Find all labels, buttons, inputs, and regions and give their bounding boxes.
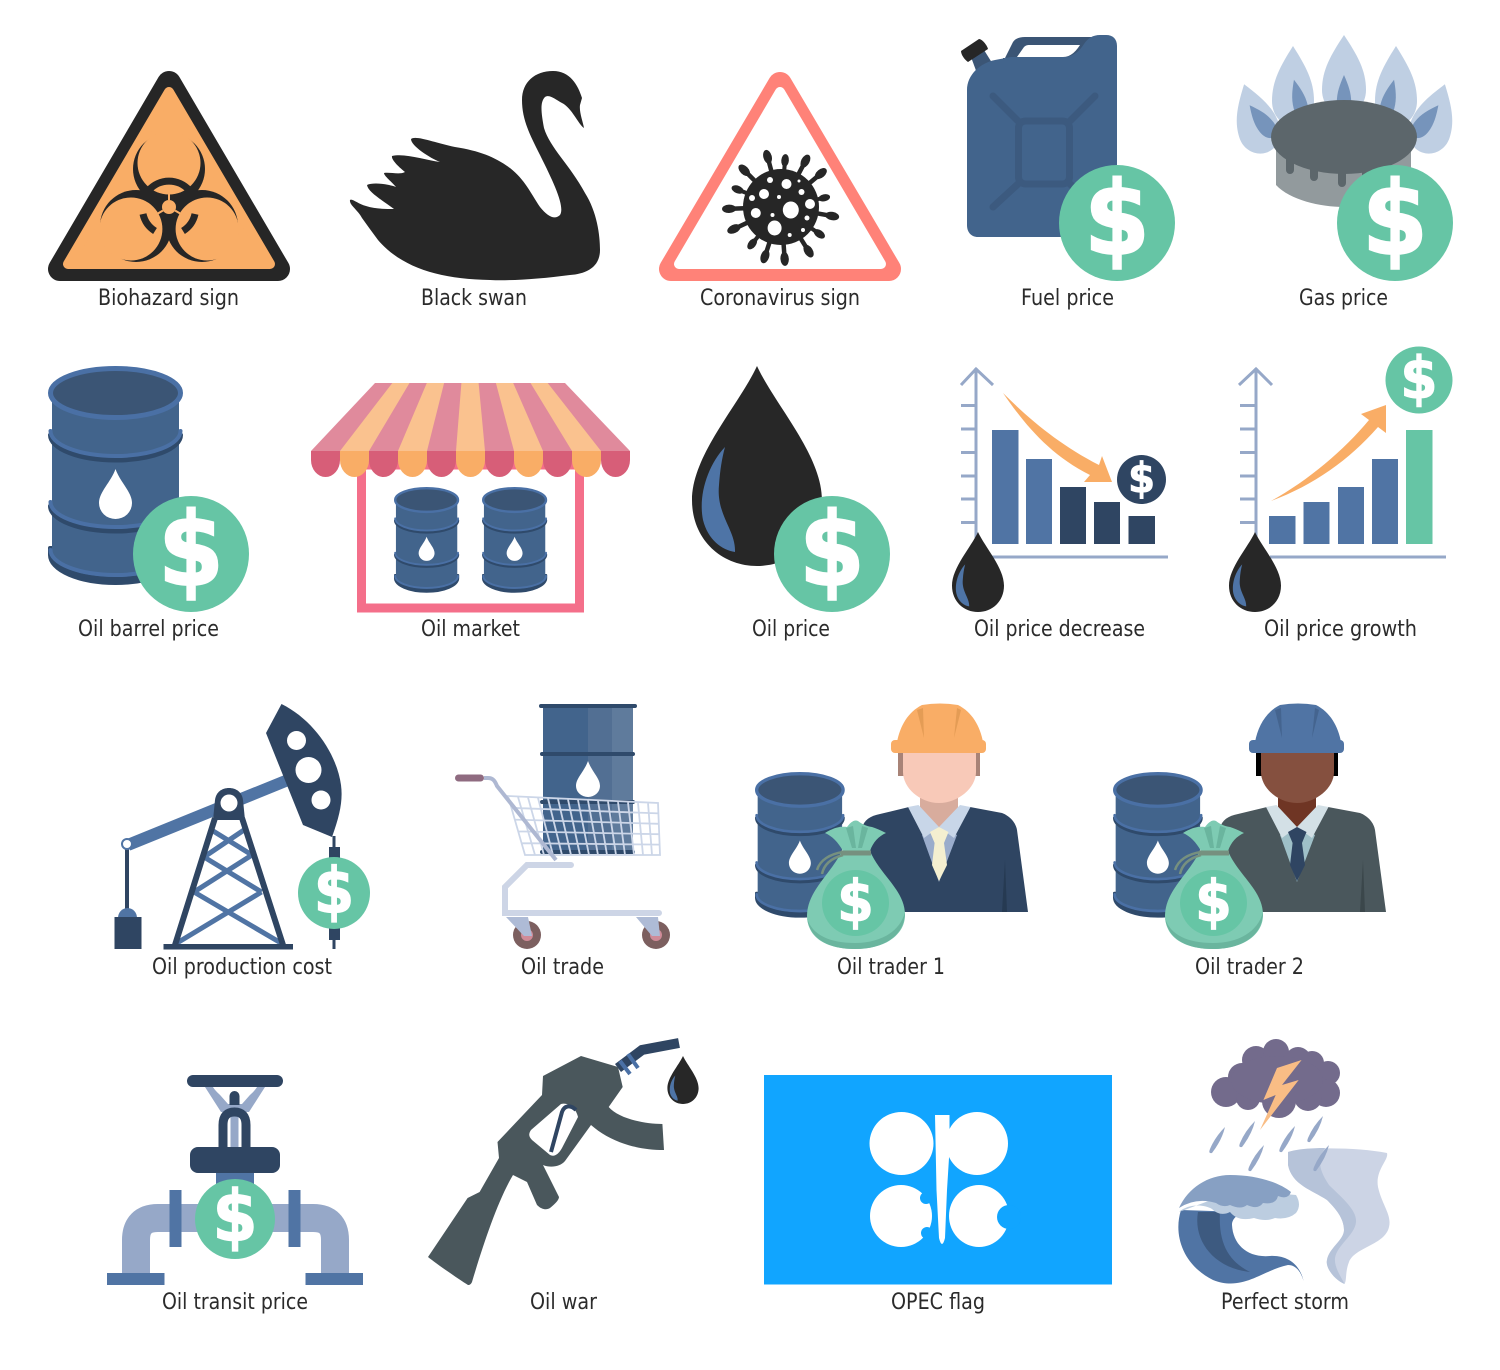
icon: flag — [764, 1075, 1112, 1284]
icon: pipe valve — [107, 1075, 363, 1285]
icon: dollar coin: $ — [213, 1176, 257, 1257]
panel: OPEC flag — [764, 1075, 1112, 1315]
panel: fuel price — [961, 35, 1175, 311]
icon: money bag — [807, 820, 905, 949]
panel: oil price growth — [1229, 345, 1452, 642]
label: Fuel price — [1021, 286, 1114, 311]
icon: fuel nozzle gun — [428, 1043, 679, 1285]
icon: money bag: $ — [1195, 868, 1232, 935]
panel: gas price — [1224, 35, 1465, 311]
icon: jerry can — [961, 35, 1117, 237]
icon: market frame — [362, 465, 580, 608]
label: Oil war — [530, 1290, 598, 1315]
icon: biohazard triangle — [60, 83, 278, 269]
icon: money bag: $ — [837, 868, 874, 935]
icon: dollar coin: $ — [799, 491, 865, 610]
panel: oil war — [428, 1043, 699, 1315]
panel: oil trader 2 — [1114, 704, 1386, 980]
panel: biohazard sign — [60, 83, 278, 311]
icon: shopping cart — [455, 774, 670, 949]
label: Biohazard sign — [98, 286, 239, 311]
arrow: growth — [1271, 405, 1386, 501]
icon: navy dollar coin: $ — [1128, 454, 1155, 503]
label: Oil market — [421, 617, 520, 642]
icon: dollar coin: $ — [314, 855, 354, 928]
panel: oil market — [311, 383, 630, 642]
icon: dollar coin: $ — [1084, 160, 1150, 279]
icon: small oil drop — [667, 1056, 699, 1104]
label: Perfect storm — [1221, 1290, 1349, 1315]
icon: virus triangle — [671, 84, 889, 269]
label: Coronavirus sign — [700, 286, 860, 311]
label: Oil price decrease — [974, 617, 1145, 642]
chart: falling bars — [961, 368, 1168, 557]
label: OPEC flag — [891, 1290, 985, 1315]
icon: small oil drop — [1229, 532, 1281, 612]
label: Oil price growth — [1264, 617, 1417, 642]
label: Oil trader 1 — [837, 955, 945, 980]
icon: tornado — [1288, 1148, 1390, 1284]
label: Black swan — [421, 286, 527, 311]
icon: dollar coin — [1337, 160, 1453, 281]
label: Gas price — [1299, 286, 1388, 311]
label: Oil barrel price — [78, 617, 219, 642]
icon: oil drop — [692, 366, 822, 566]
label: Oil production cost — [152, 955, 332, 980]
icon: swan — [350, 71, 600, 280]
panel: oil price decrease — [952, 368, 1168, 642]
icon: storm cloud — [1211, 1039, 1340, 1118]
label: Oil price — [752, 617, 830, 642]
icon: pump jack — [114, 704, 342, 950]
label: Oil transit price — [162, 1290, 308, 1315]
icon: market barrels — [395, 488, 546, 592]
icon: lightning bolt — [1260, 1060, 1302, 1130]
icon: awning — [311, 383, 630, 477]
icon: money bag — [1165, 820, 1263, 949]
icon: dollar coin — [298, 855, 370, 929]
panel: oil production cost — [114, 704, 370, 980]
panel: oil trade — [455, 706, 670, 980]
icon: navy dollar coin — [1117, 454, 1166, 504]
icon: dollar coin — [1059, 160, 1175, 281]
icon: trader figure — [860, 704, 1028, 912]
icon: dollar coin — [133, 491, 249, 612]
panel: oil price — [692, 366, 890, 642]
icon: gas burner — [1224, 35, 1465, 207]
panel: oil trader 1 — [756, 704, 1028, 980]
panel: coronavirus sign — [671, 84, 889, 311]
icon: dollar coin: $ — [1400, 345, 1438, 413]
icon: barrel — [1114, 774, 1201, 916]
arrow: decrease — [1003, 393, 1112, 482]
panel: oil barrel price — [50, 368, 249, 642]
icon: trader figure — [1218, 704, 1386, 912]
panel: black swan — [350, 71, 600, 311]
icon: barrel — [756, 774, 843, 916]
icon: dollar coin — [1386, 345, 1452, 414]
label: Oil trader 2 — [1195, 955, 1304, 980]
panel: oil transit price — [107, 1075, 363, 1315]
icon: rain — [1209, 1116, 1329, 1171]
panel: perfect storm — [1178, 1039, 1390, 1315]
icon: small oil drop — [952, 532, 1004, 612]
icon: dollar coin — [195, 1176, 275, 1259]
chart: rising bars — [1239, 368, 1446, 557]
icon: dollar coin — [774, 491, 890, 612]
icon: barrel in upright view — [541, 706, 635, 854]
icon: dollar coin: $ — [1362, 160, 1428, 279]
icon: barrel — [50, 368, 181, 583]
icon: dollar coin: $ — [158, 491, 224, 610]
icon: wave — [1178, 1175, 1304, 1284]
label: Oil trade — [521, 955, 604, 980]
